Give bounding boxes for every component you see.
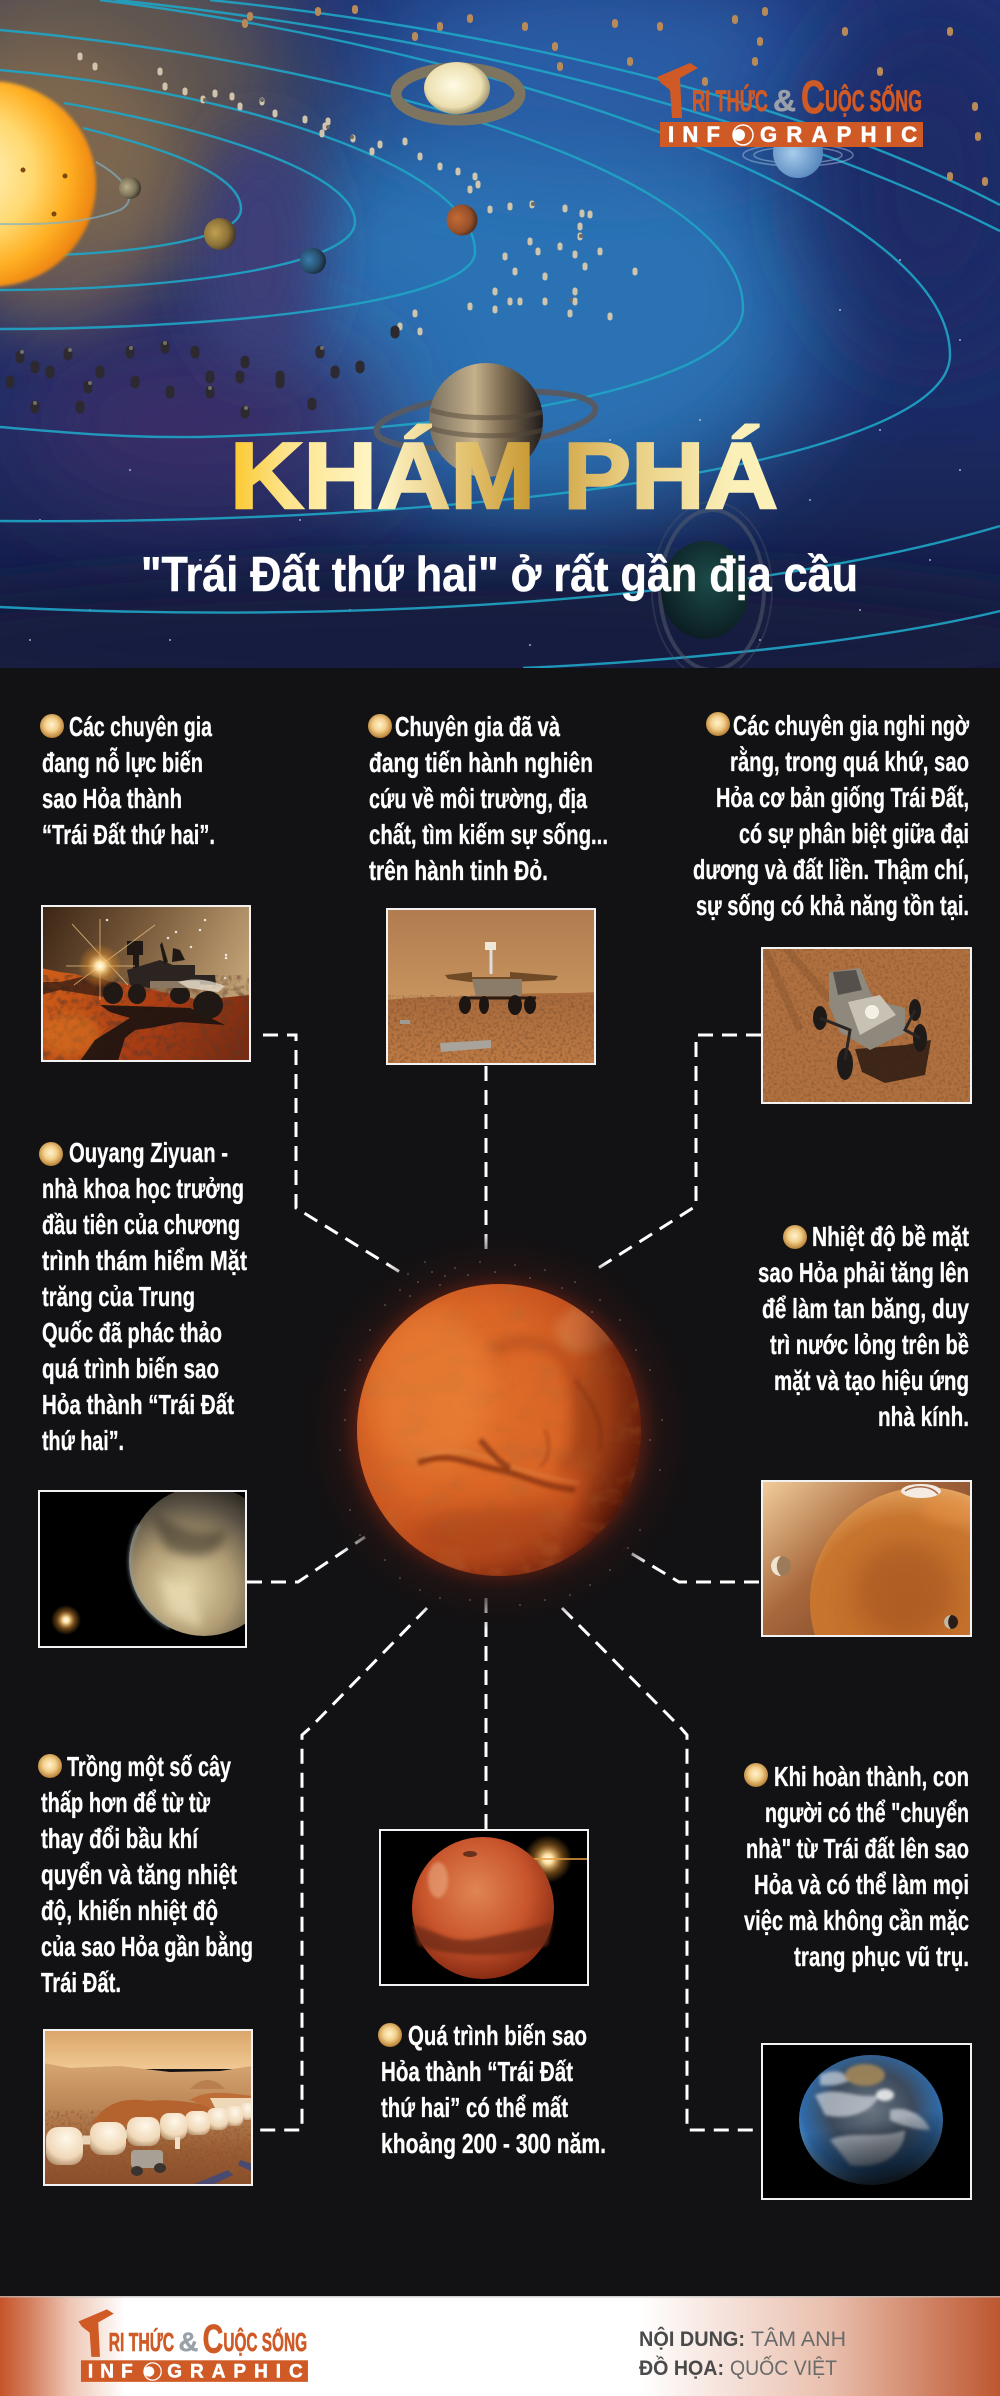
text: quá trình biến sao xyxy=(42,1353,219,1384)
logo: Tri Thuc & Cuoc Song Infographic (header): RI THỨC xyxy=(692,84,768,118)
text: chất, tìm kiếm sự sống... xyxy=(369,819,608,850)
saturn xyxy=(396,62,520,120)
text: đang tiến hành nghiên xyxy=(369,747,593,778)
dashed connectors xyxy=(247,1035,761,2130)
text: Trồng một số cây xyxy=(67,1751,231,1782)
panel: Mars once like Earth xyxy=(693,710,969,921)
logo: Tri Thuc & Cuoc Song Infographic (footer): GRAPHIC xyxy=(167,2362,303,2383)
sun xyxy=(0,81,96,287)
photo: red planet Mars xyxy=(379,1829,589,1986)
text: Trái Đất. xyxy=(41,1967,121,1998)
orbits xyxy=(0,0,1000,668)
stars xyxy=(30,260,960,645)
logo: Tri Thuc & Cuoc Song Infographic (footer): INF xyxy=(88,2362,133,2383)
bullet xyxy=(38,1754,62,1778)
text xyxy=(693,710,969,921)
logo: Tri Thuc & Cuoc Song Infographic (header): C xyxy=(801,71,825,123)
logo: Tri Thuc & Cuoc Song Infographic (header): & xyxy=(773,83,796,118)
photo: Mars with moons xyxy=(761,1480,1000,1717)
text xyxy=(744,1761,969,1972)
logo: Tri Thuc & Cuoc Song Infographic (footer): C xyxy=(203,2318,223,2362)
text: “Trái Đất thứ hai”. xyxy=(42,819,215,850)
text xyxy=(41,1751,253,1998)
logo: Tri Thuc & Cuoc Song Infographic (header): GRAPHIC xyxy=(760,122,917,147)
text: sao Hỏa thành xyxy=(42,783,182,814)
credits: TÂM ANH xyxy=(751,2328,846,2351)
neptune xyxy=(652,502,772,678)
title: KHÁM PHÁ xyxy=(230,423,778,528)
credits: NỘI DUNG: xyxy=(639,2327,745,2351)
bullet xyxy=(40,714,64,738)
belt asteroids xyxy=(80,55,635,333)
text: khoảng 200 - 300 năm. xyxy=(381,2128,606,2159)
text xyxy=(381,2020,606,2159)
text: trình thám hiểm Mặt xyxy=(42,1245,247,1276)
text: Hỏa thành “Trái Đất xyxy=(42,1389,234,1420)
rover xyxy=(813,968,927,1080)
logo: Tri Thuc & Cuoc Song Infographic (footer): & xyxy=(178,2327,198,2357)
uranus xyxy=(743,128,853,178)
text: trăng của Trung xyxy=(42,1281,195,1312)
text xyxy=(758,1221,969,1432)
illustration: planet Mars with dust xyxy=(328,1234,671,1628)
photo: exoplanet and star xyxy=(38,1486,279,1647)
text: Quá trình biến sao xyxy=(408,2020,587,2051)
text xyxy=(42,711,215,850)
logo: Tri Thuc & Cuoc Song Infographic (footer): RI THỨC xyxy=(109,2327,174,2357)
jupiter xyxy=(374,363,598,477)
text: đang nỗ lực biến xyxy=(42,747,203,778)
photo: rover from above xyxy=(761,947,971,1103)
bullet xyxy=(783,1225,807,1249)
bullet xyxy=(744,1763,768,1787)
logo: Tri Thuc & Cuoc Song Infographic (header) xyxy=(657,63,923,147)
dark asteroids xyxy=(10,330,395,414)
credits xyxy=(639,2327,846,2380)
text: nhà kính. xyxy=(878,1401,969,1432)
logo: Tri Thuc & Cuoc Song Infographic (footer): UỘC SỐNG xyxy=(223,2327,307,2357)
text: Các chuyên gia xyxy=(69,711,212,742)
text: trên hành tinh Đỏ. xyxy=(369,855,548,886)
credits: QUỐC VIỆT xyxy=(730,2356,837,2380)
text: thứ hai” có thể mất xyxy=(381,2092,568,2123)
text: Ouyang Ziyuan - xyxy=(69,1137,228,1168)
subtitle: "Trái Đất thứ hai" ở rất gần địa cầu xyxy=(141,548,858,602)
text: quyển và tăng nhiệt xyxy=(41,1859,237,1890)
text: Hỏa thành “Trái Đất xyxy=(381,2056,573,2087)
panel: Ouyang Ziyuan xyxy=(39,1137,247,1456)
rover xyxy=(445,942,558,1015)
logo: Tri Thuc & Cuoc Song Infographic (footer) xyxy=(78,2309,308,2383)
text: của sao Hỏa gần bằng xyxy=(41,1931,253,1962)
bullet xyxy=(39,1142,63,1166)
text xyxy=(42,1137,247,1456)
domes xyxy=(92,2100,222,2125)
footer band xyxy=(0,2296,1000,2396)
text: Quốc đã phác thảo xyxy=(42,1317,222,1348)
text: độ, khiến nhiệt độ xyxy=(41,1895,218,1926)
text: nhà khoa học trưởng xyxy=(42,1173,244,1204)
text: cứu về môi trường, địa xyxy=(369,783,587,814)
text: thấp hơn để từ từ xyxy=(41,1787,211,1818)
credits: ĐỒ HỌA: xyxy=(639,2356,724,2380)
rover xyxy=(103,941,225,1019)
photo: rover at sunrise xyxy=(40,905,250,1061)
photo: Mars habitat pods xyxy=(43,2029,254,2186)
panel: experts transforming Mars xyxy=(40,711,215,850)
panel: 200-300 years xyxy=(378,2020,606,2159)
text: thay đổi bầu khí xyxy=(41,1823,199,1854)
photo: Earth from space xyxy=(761,2043,971,2200)
bullet xyxy=(706,712,730,736)
text: thứ hai”. xyxy=(42,1425,124,1456)
header: solar system illustration xyxy=(0,0,1000,668)
logo: Tri Thuc & Cuoc Song Infographic (header): INF xyxy=(668,122,720,147)
text: Chuyên gia đã và xyxy=(395,711,560,742)
text: đầu tiên của chương xyxy=(42,1209,240,1240)
text xyxy=(369,711,608,886)
photo: rover on plain xyxy=(386,908,595,1064)
bullet xyxy=(378,2023,402,2047)
panel: ongoing research xyxy=(368,711,608,886)
bullet xyxy=(368,714,392,738)
panel: moving house to Mars xyxy=(744,1761,969,1972)
panel: surface temperature xyxy=(758,1221,969,1432)
habitat pods xyxy=(46,2103,254,2165)
panel: planting low trees xyxy=(38,1751,253,1998)
logo: Tri Thuc & Cuoc Song Infographic (header): UỘC SỐNG xyxy=(825,84,922,118)
inner planets xyxy=(119,177,478,274)
